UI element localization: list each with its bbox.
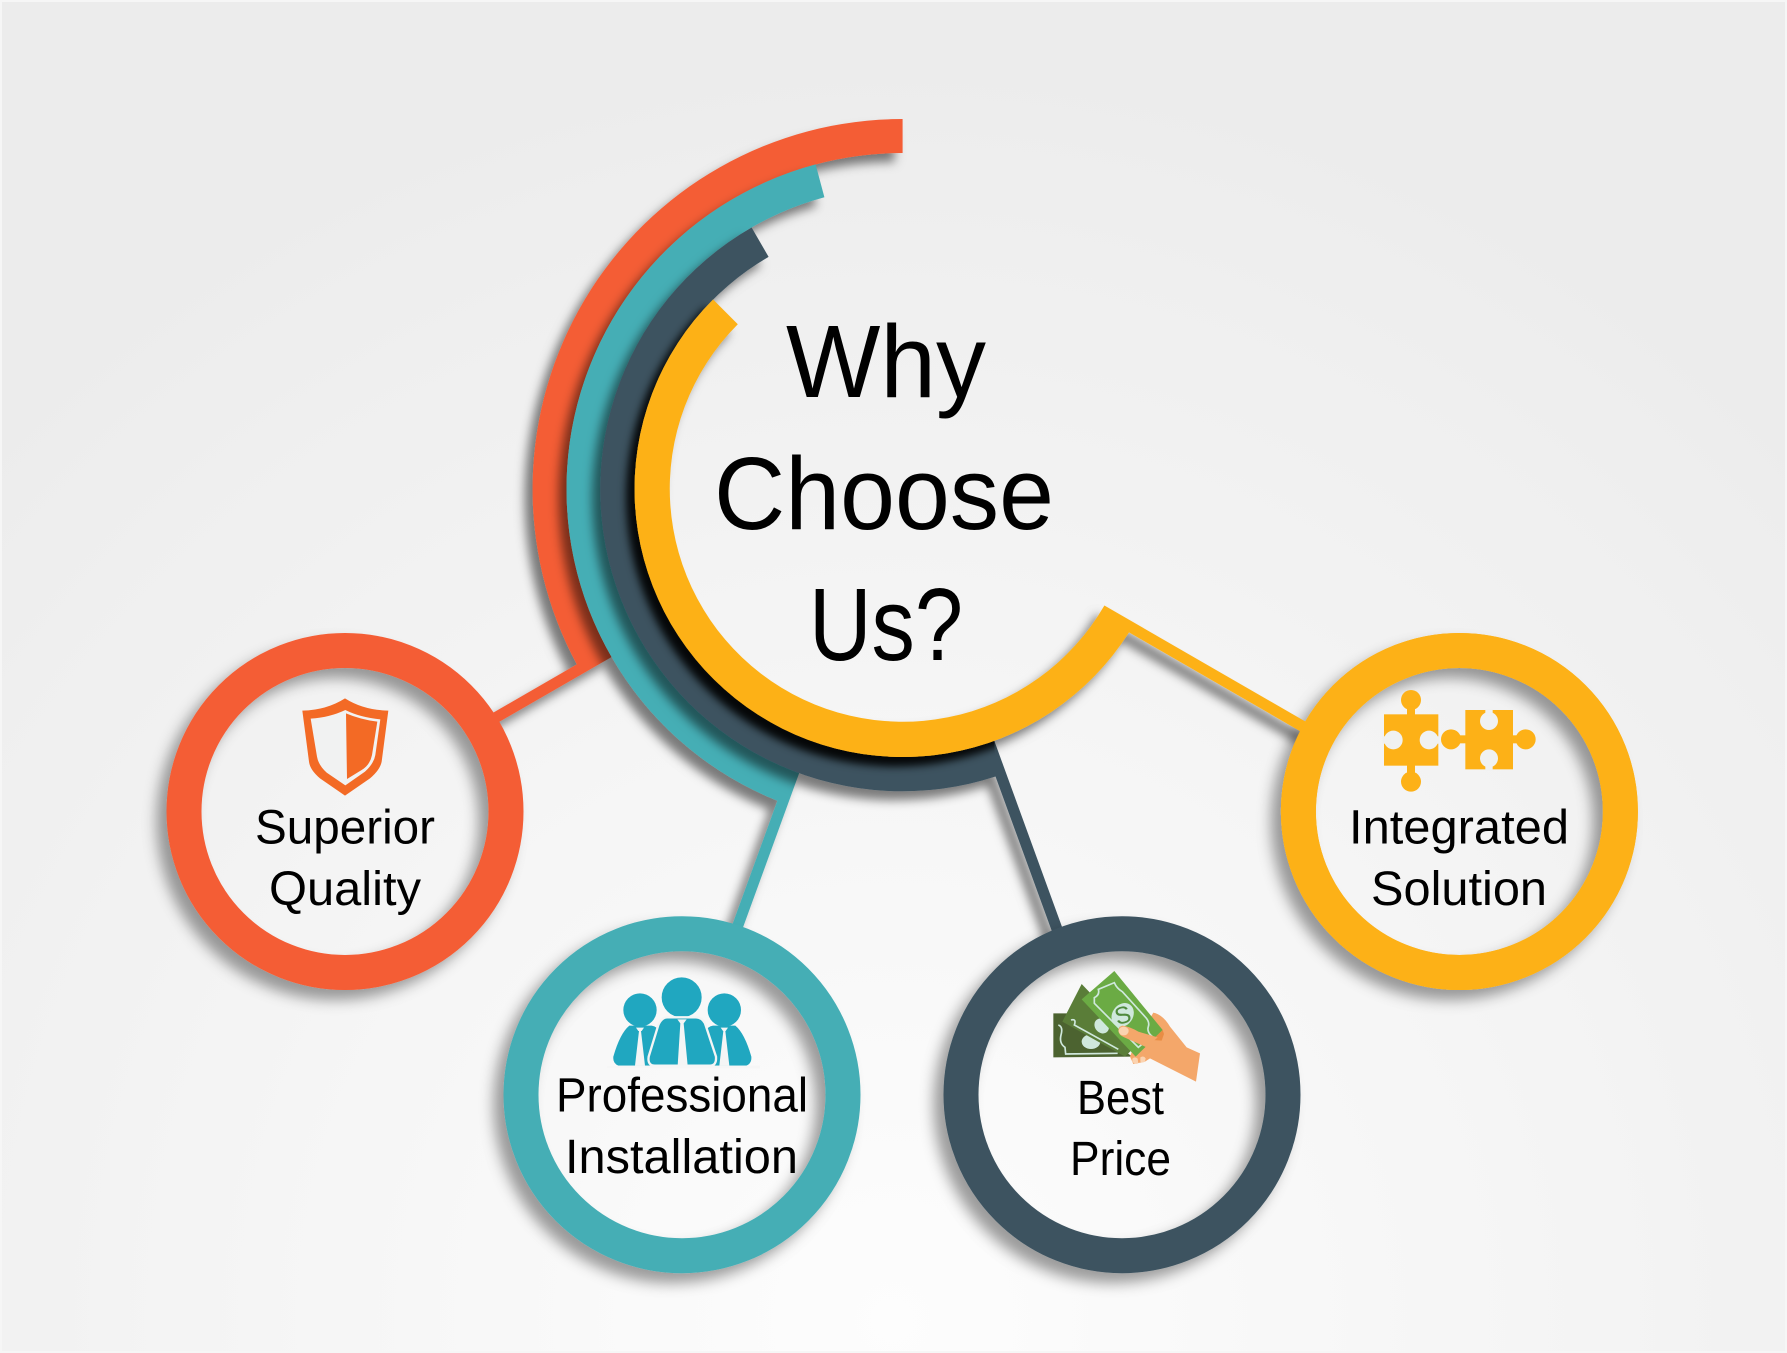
label: Superior Quality: Superior — [255, 802, 435, 854]
label: Integrated Solution — [1349, 802, 1569, 916]
infographic — [149, 119, 1638, 1351]
title: Why — [786, 304, 986, 419]
label: Professional Installation: Professional — [556, 1070, 808, 1122]
panel: Best Price arc and ring — [600, 228, 1283, 1256]
panel: Superior Quality arc and ring — [184, 119, 903, 972]
label: Superior Quality — [255, 802, 435, 916]
label: Professional Installation — [556, 1070, 808, 1184]
label: Best Price: Best — [1077, 1072, 1164, 1125]
title: Choose — [714, 436, 1054, 551]
icon: cash in hand: S — [1112, 1001, 1134, 1031]
icon: shield — [302, 698, 388, 796]
label: Best Price — [1070, 1072, 1171, 1186]
label: Superior Quality: Quality — [269, 863, 421, 916]
title — [714, 304, 1054, 682]
title: Us? — [809, 567, 963, 682]
icon: cash in hand — [1053, 971, 1200, 1082]
label: Integrated Solution: Solution — [1371, 863, 1547, 916]
panel: Integrated Solution arc and ring — [635, 300, 1620, 972]
label: Best Price: Price — [1070, 1133, 1171, 1186]
panel: Professional Installation arc and ring — [521, 164, 843, 1256]
icon: business people — [607, 977, 760, 1068]
label: Professional Installation: Installation — [565, 1131, 798, 1184]
icon: puzzle pieces — [1383, 690, 1536, 792]
label: Integrated Solution: Integrated — [1349, 802, 1569, 854]
